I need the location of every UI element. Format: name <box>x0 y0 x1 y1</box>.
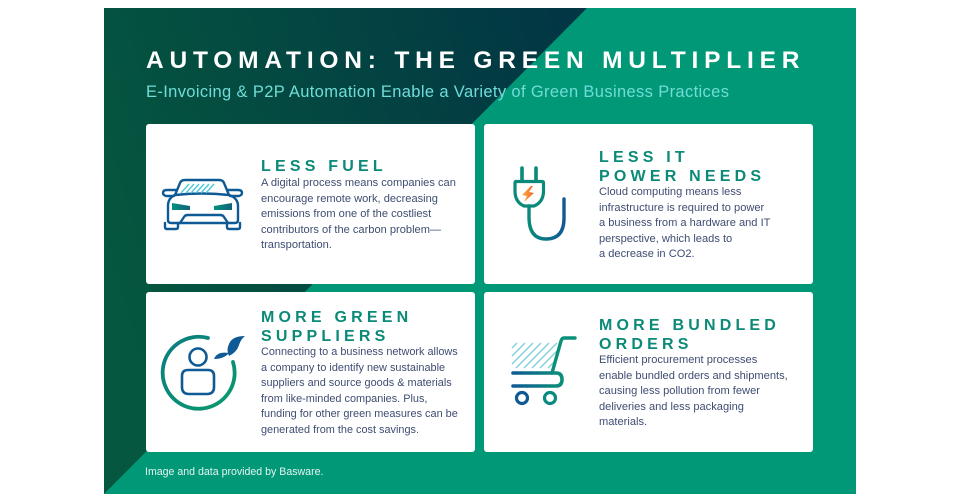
icon: person with leaf <box>160 334 245 411</box>
body text: causing less pollution from fewer <box>599 385 760 397</box>
title: AUTOMATION: THE GREEN MULTIPLIER <box>146 47 805 74</box>
heading: SUPPLIERS <box>261 328 390 345</box>
panel: more green suppliers <box>146 292 475 452</box>
body text: Connecting to a business network allows <box>261 346 458 358</box>
body text <box>261 177 456 251</box>
body text: deliveries and less packaging <box>599 401 744 413</box>
body text: perspective, which leads to <box>599 233 732 245</box>
body text: Efficient procurement processes <box>599 354 757 366</box>
body text: infrastructure is required to power <box>599 202 764 214</box>
icon: shopping cart <box>511 336 577 406</box>
background banner <box>104 8 856 494</box>
body text: transportation. <box>261 239 332 251</box>
body text: emissions from one of the costliest <box>261 208 431 220</box>
credit: Image and data provided by Basware. <box>145 466 323 478</box>
panel: less fuel <box>146 124 475 284</box>
icon: plug <box>513 166 566 241</box>
body text: from like-minded companies. Plus, <box>261 393 427 405</box>
heading: MORE GREEN <box>261 309 412 326</box>
body text: A digital process means companies can <box>261 177 456 189</box>
body text: funding for other green measures can be <box>261 408 458 420</box>
panel: less IT power needs <box>484 124 813 284</box>
body text: suppliers and source goods & materials <box>261 377 452 389</box>
icon: car <box>162 178 244 230</box>
heading: ORDERS <box>599 336 693 353</box>
body text: a business from a hardware and IT <box>599 217 770 229</box>
body text: a decrease in CO2. <box>599 248 695 260</box>
heading <box>599 317 780 353</box>
heading: LESS IT <box>599 149 689 166</box>
heading: MORE BUNDLED <box>599 317 780 334</box>
heading: POWER NEEDS <box>599 168 765 185</box>
body text: generated from the cost savings. <box>261 424 419 436</box>
body text: Cloud computing means less <box>599 186 741 198</box>
body text <box>599 186 770 260</box>
panel: more bundled orders <box>484 292 813 452</box>
body text <box>261 346 458 436</box>
subtitle: E-Invoicing & P2P Automation Enable a Variety of Green Business Practices <box>146 83 729 101</box>
body text: encourage remote work, decreasing <box>261 193 438 205</box>
body text: a company to identify new sustainable <box>261 362 445 374</box>
body text <box>599 354 788 428</box>
heading: LESS FUEL <box>261 158 387 175</box>
body text: enable bundled orders and shipments, <box>599 370 788 382</box>
heading <box>261 309 412 345</box>
body text: contributors of the carbon problem— <box>261 224 441 236</box>
heading <box>599 149 765 185</box>
body text: materials. <box>599 416 647 428</box>
